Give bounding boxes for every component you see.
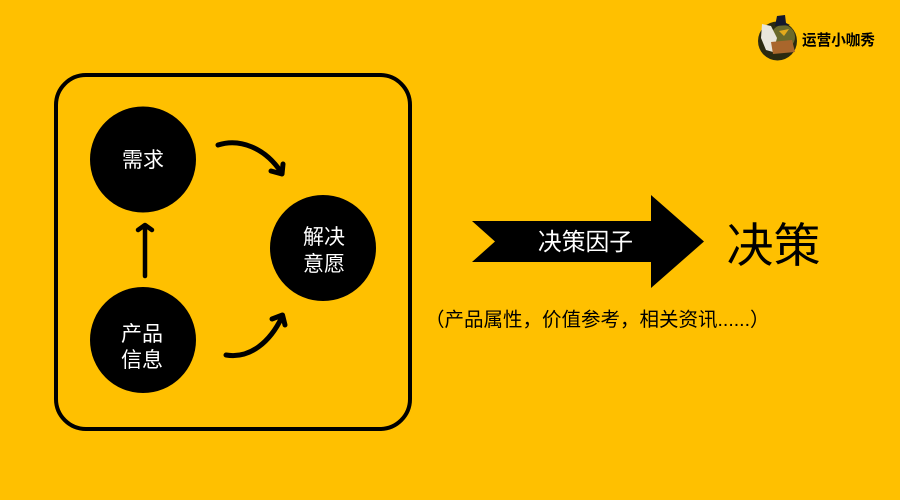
arrow banner: decision factors — [472, 195, 704, 288]
node: product information — [90, 287, 196, 393]
node: product information: 产品 — [121, 323, 163, 346]
arrow banner: decision factors: 决策因子 — [538, 229, 633, 256]
icon: eagle mascot — [758, 15, 797, 60]
arrow: product information to demand — [138, 225, 152, 276]
node: demand: 需求 — [122, 149, 164, 172]
node: product information: 信息 — [121, 349, 163, 372]
panel: decision factors frame — [56, 75, 410, 429]
logo wordmark: 运营小咖秀 — [802, 31, 875, 49]
caption: factor examples: （产品属性，价值参考，相关资讯......） — [425, 309, 770, 331]
node: solution intent: 意愿 — [303, 253, 345, 276]
heading: decision: 决策 — [726, 219, 820, 272]
node: solution intent: 解决 — [303, 226, 345, 249]
arrow: product information to intent — [226, 315, 285, 356]
node: solution intent — [270, 195, 376, 301]
logo: brand badge — [758, 15, 875, 60]
node: demand — [90, 106, 196, 212]
arrow: demand to intent — [218, 143, 283, 174]
